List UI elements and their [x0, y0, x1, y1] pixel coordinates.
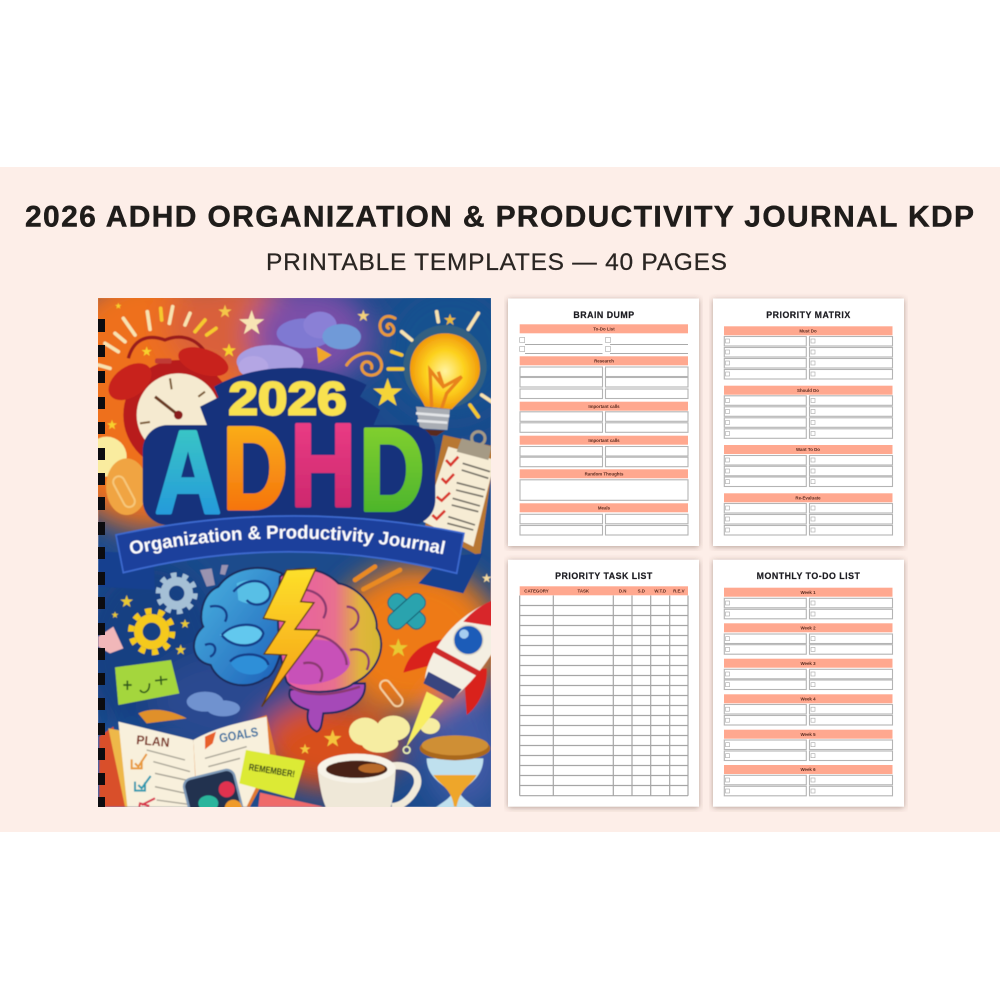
- icon: phone: [182, 768, 244, 807]
- panel: priority task list page: [508, 560, 699, 807]
- icon: play triangle: [317, 347, 332, 363]
- icon: rocket: [403, 600, 495, 753]
- table grid: [520, 596, 688, 796]
- background band: [0, 167, 1000, 832]
- icon: blue cloud: [98, 627, 240, 716]
- cover year: 2026: [228, 373, 347, 425]
- section: week 2: [724, 623, 892, 654]
- section: want to do: Want To Do: [796, 447, 820, 452]
- icon: coffee cup: [318, 754, 418, 813]
- icon: hourglass: [420, 735, 490, 813]
- icon: teal X: [386, 592, 427, 630]
- section: week 2: Week 2: [800, 626, 816, 630]
- subtitle: PRINTABLE TEMPLATES — 40 PAGES: [266, 249, 727, 276]
- table header: W.T.D: [654, 588, 666, 593]
- icon: remember note: REMEMBER!: [248, 762, 296, 779]
- table header: D.N: [619, 588, 626, 593]
- section: week 4: Week 4: [800, 696, 816, 702]
- cover word ADHD: [155, 422, 423, 516]
- section: must do: [724, 326, 892, 379]
- icon: light bulb: [403, 325, 487, 436]
- icon: ribbon shadow bits: [200, 565, 228, 587]
- icon: remember note: [239, 750, 305, 798]
- section: must do: Must Do: [799, 328, 817, 334]
- table header: TASK: [577, 588, 590, 593]
- heading: priority task list: PRIORITY TASK LIST: [555, 571, 653, 581]
- cover word ADHD: D: [359, 404, 424, 535]
- icon: sticky note: [115, 660, 179, 705]
- icon: stars: [107, 303, 456, 429]
- icon: cream cloud: [349, 716, 440, 753]
- section: week 6: Week 6: [800, 767, 816, 772]
- section: research: Research: [594, 358, 614, 364]
- ribbon tails: [98, 552, 483, 593]
- icon: title plate: [143, 368, 435, 525]
- section: should do: Should Do: [797, 388, 819, 393]
- icon: small stars: [112, 573, 491, 754]
- section: week 1: [724, 588, 892, 619]
- section: important calls second: Important calls: [588, 438, 620, 443]
- table header: S.D: [638, 588, 645, 593]
- section: want to do: [724, 445, 892, 486]
- icon: open book: GOALS: [218, 725, 259, 746]
- table header: CATEGORY: [524, 588, 549, 593]
- section: week 5: [724, 730, 892, 760]
- heading: monthly to-do list: MONTHLY TO-DO LIST: [757, 571, 860, 581]
- section: random thoughts: [520, 469, 688, 500]
- section: week 5: Week 5: [800, 732, 816, 737]
- icon: clouds: [237, 312, 361, 378]
- icon: orange streaks: [355, 567, 400, 589]
- section: should do: [724, 386, 892, 438]
- title: 2026 ADHD ORGANIZATION & PRODUCTIVITY JOURNAL KDP: [25, 200, 974, 234]
- icon: clipboard: [423, 432, 495, 557]
- section: week 6: [724, 765, 892, 796]
- icon: open book: [99, 710, 277, 807]
- cover bottom illustrations: [98, 565, 495, 849]
- panel: brain dump page: [508, 298, 699, 546]
- section: meals: [520, 503, 688, 535]
- section: random thoughts: Random Thoughts: [585, 472, 624, 476]
- section: week 3: Week 3: [800, 661, 816, 666]
- icon: open book: PLAN: [136, 733, 170, 750]
- heading: priority matrix: PRIORITY MATRIX: [766, 310, 851, 320]
- section: important calls: Important calls: [588, 404, 620, 409]
- section: re-evaluate: Re-Evaluate: [795, 496, 821, 500]
- section: to-do list: [520, 324, 688, 354]
- cover word ADHD: H: [291, 399, 356, 530]
- icon: lightning bolt: [262, 568, 319, 707]
- section: week 1: Week 1: [800, 590, 816, 595]
- table header: R.E.V: [673, 588, 685, 593]
- cover word ADHD: A: [155, 407, 221, 538]
- icon: swirls: [347, 316, 395, 375]
- icon: paperclip: [378, 678, 405, 708]
- icon: gears: [131, 575, 195, 652]
- spiral binding: [98, 319, 105, 807]
- icon: clock rays: [98, 307, 492, 417]
- section: meals: Meals: [598, 506, 611, 510]
- icon: left cloud and paperclip: [98, 436, 144, 516]
- section: week 3: [724, 659, 892, 690]
- table header: [520, 586, 688, 595]
- panel: priority matrix page: [713, 298, 904, 546]
- section: important calls: [520, 402, 688, 432]
- section: research: [520, 356, 688, 398]
- section: week 4: [724, 694, 892, 725]
- icon: pink note: [258, 793, 323, 807]
- cover top illustrations: [98, 302, 491, 594]
- cover word ADHD: D: [223, 403, 288, 534]
- section: re-evaluate: [724, 493, 892, 535]
- panel: monthly to-do list page: [713, 560, 904, 807]
- section: to-do list: To-Do List: [593, 326, 615, 332]
- section: important calls second: [520, 436, 688, 467]
- ribbon: [116, 516, 464, 573]
- ribbon text: Organization & Productivity Journal: [129, 524, 446, 555]
- heading: brain dump: BRAIN DUMP: [573, 310, 635, 320]
- icon: brain: [194, 568, 381, 732]
- icon: alarm clock: [108, 335, 229, 457]
- panel: journal cover: [98, 298, 491, 807]
